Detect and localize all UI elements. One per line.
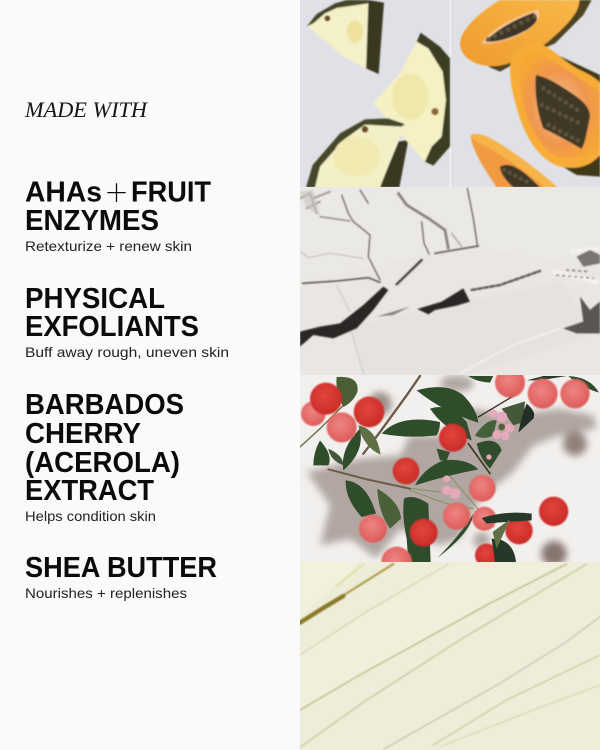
pineapple slices	[306, 0, 450, 187]
heading: AHAs + fruit: FRUIT	[131, 176, 211, 208]
papaya halves	[460, 0, 600, 187]
butter ridges	[300, 564, 600, 749]
ingredient: barbados cherry	[25, 389, 184, 524]
heading: extract: EXTRACT	[25, 475, 154, 507]
ingredient: physical exfoliants	[25, 283, 229, 360]
heading: AHAs + fruit	[25, 174, 211, 210]
cracks	[300, 188, 597, 373]
photo: acerola cherries	[300, 375, 600, 562]
description: Nourishes + replenishes	[25, 585, 187, 601]
heading: AHAs + fruit: ＋	[104, 174, 129, 210]
description: Helps condition skin	[25, 508, 156, 524]
ingredient: AHAs and fruit enzymes	[25, 174, 211, 254]
photo: pineapple and papaya	[300, 0, 600, 187]
description: Buff away rough, uneven skin	[25, 344, 229, 360]
heading: barbados: BARBADOS	[25, 389, 184, 421]
heading: physical: PHYSICAL	[25, 283, 165, 315]
leaves	[313, 376, 599, 562]
photo: shea butter texture	[300, 562, 600, 750]
heading: shea butter: SHEA BUTTER	[25, 552, 217, 584]
heading: cherry: CHERRY	[25, 418, 141, 450]
photo: cracked white clay	[300, 187, 600, 375]
ingredient: shea butter	[25, 552, 217, 601]
heading: made with: MADE WITH	[24, 97, 148, 122]
description: Retexturize + renew skin	[25, 238, 192, 254]
berries	[300, 375, 591, 562]
heading: AHAs + fruit: AHAs	[25, 176, 102, 208]
heading: acerola: (ACEROLA)	[25, 447, 180, 479]
front leaves	[482, 513, 532, 562]
cast shadows	[307, 375, 597, 566]
heading: enzymes: ENZYMES	[25, 205, 159, 237]
flowers	[442, 410, 514, 499]
heading: exfoliants: EXFOLIANTS	[25, 311, 199, 343]
stems	[300, 376, 513, 527]
